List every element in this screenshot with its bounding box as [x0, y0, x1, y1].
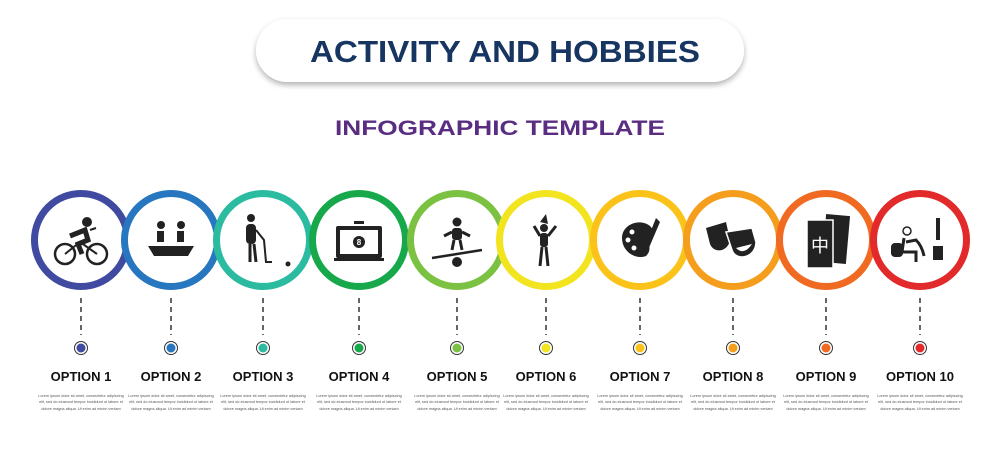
icon: canoe: [148, 221, 194, 256]
option 1: [34, 194, 128, 411]
subtitle: INFOGRAPHIC TEMPLATE: [335, 117, 665, 140]
body text: [414, 394, 500, 411]
label: OPTION 9: [796, 369, 856, 384]
option 3: [216, 194, 310, 411]
body text: Lorem ipsum dolor sit amet, consectetur adipiscing: [503, 394, 589, 398]
option 10: [874, 194, 966, 411]
icon: golfer: [246, 214, 290, 266]
body text: [316, 394, 402, 411]
option 7: [594, 194, 686, 411]
body text: dolore magna aliqua. Ut enim ad minim veniam: [693, 407, 773, 411]
body text: Lorem ipsum dolor sit amet, consectetur adipiscing: [414, 394, 500, 398]
icon: palette: [622, 218, 660, 257]
label: OPTION 10: [886, 369, 954, 384]
icon: balance board: [432, 218, 482, 267]
body text: [690, 394, 776, 411]
option 2: [124, 194, 218, 411]
body text: elit, sed do eiusmod tempor incididunt ut labore et: [317, 400, 402, 404]
icon: party person: [534, 214, 556, 266]
icon: mahjong tiles: [807, 214, 850, 268]
body text: elit, sed do eiusmod tempor incididunt ut labore et: [691, 400, 776, 404]
body text: [38, 394, 124, 411]
body text: dolore magna aliqua. Ut enim ad minim veniam: [786, 407, 866, 411]
body text: dolore magna aliqua. Ut enim ad minim veniam: [223, 407, 303, 411]
body text: Lorem ipsum dolor sit amet, consectetur adipiscing: [597, 394, 683, 398]
body text: elit, sed do eiusmod tempor incididunt ut labore et: [129, 400, 214, 404]
label: OPTION 8: [703, 369, 763, 384]
label: OPTION 6: [516, 369, 576, 384]
body text: Lorem ipsum dolor sit amet, consectetur adipiscing: [783, 394, 869, 398]
body text: elit, sed do eiusmod tempor incididunt ut labore et: [504, 400, 589, 404]
icon: cyclist: [55, 217, 107, 264]
body text: elit, sed do eiusmod tempor incididunt ut labore et: [598, 400, 683, 404]
option 9: [780, 194, 872, 411]
body text: Lorem ipsum dolor sit amet, consectetur adipiscing: [128, 394, 214, 398]
option 4: [312, 194, 406, 411]
icon: mahjong tiles: 中: [811, 232, 829, 258]
body text: Lorem ipsum dolor sit amet, consectetur adipiscing: [38, 394, 124, 398]
option 5: [410, 194, 504, 411]
label: OPTION 1: [51, 369, 111, 384]
body text: [128, 394, 214, 411]
icon: theater masks: [706, 222, 756, 257]
body text: dolore magna aliqua. Ut enim ad minim veniam: [319, 407, 399, 411]
body text: dolore magna aliqua. Ut enim ad minim veniam: [880, 407, 960, 411]
icon: knitting: [891, 218, 943, 262]
body text: elit, sed do eiusmod tempor incididunt ut labore et: [221, 400, 306, 404]
body text: dolore magna aliqua. Ut enim ad minim veniam: [417, 407, 497, 411]
body text: elit, sed do eiusmod tempor incididunt ut labore et: [39, 400, 124, 404]
body text: [877, 394, 963, 411]
body text: dolore magna aliqua. Ut enim ad minim veniam: [41, 407, 121, 411]
label: OPTION 3: [233, 369, 293, 384]
title pill: [256, 19, 744, 82]
body text: elit, sed do eiusmod tempor incididunt ut labore et: [415, 400, 500, 404]
label: OPTION 4: [329, 369, 390, 384]
title: ACTIVITY AND HOBBIES: [310, 34, 700, 69]
body text: dolore magna aliqua. Ut enim ad minim veniam: [506, 407, 586, 411]
icon: pool table: [334, 221, 384, 261]
body text: dolore magna aliqua. Ut enim ad minim veniam: [131, 407, 211, 411]
body text: dolore magna aliqua. Ut enim ad minim veniam: [600, 407, 680, 411]
option 6: [500, 194, 592, 411]
icon: pool table: 8: [357, 238, 362, 247]
body text: [503, 394, 589, 411]
label: OPTION 2: [141, 369, 201, 384]
label: OPTION 7: [610, 369, 670, 384]
body text: Lorem ipsum dolor sit amet, consectetur adipiscing: [877, 394, 963, 398]
body text: Lorem ipsum dolor sit amet, consectetur adipiscing: [316, 394, 402, 398]
body text: elit, sed do eiusmod tempor incididunt ut labore et: [784, 400, 869, 404]
option 8: [686, 194, 780, 411]
body text: [597, 394, 683, 411]
body text: Lorem ipsum dolor sit amet, consectetur adipiscing: [690, 394, 776, 398]
body text: Lorem ipsum dolor sit amet, consectetur adipiscing: [220, 394, 306, 398]
body text: [220, 394, 306, 411]
body text: elit, sed do eiusmod tempor incididunt ut labore et: [878, 400, 963, 404]
label: OPTION 5: [427, 369, 487, 384]
body text: [783, 394, 869, 411]
